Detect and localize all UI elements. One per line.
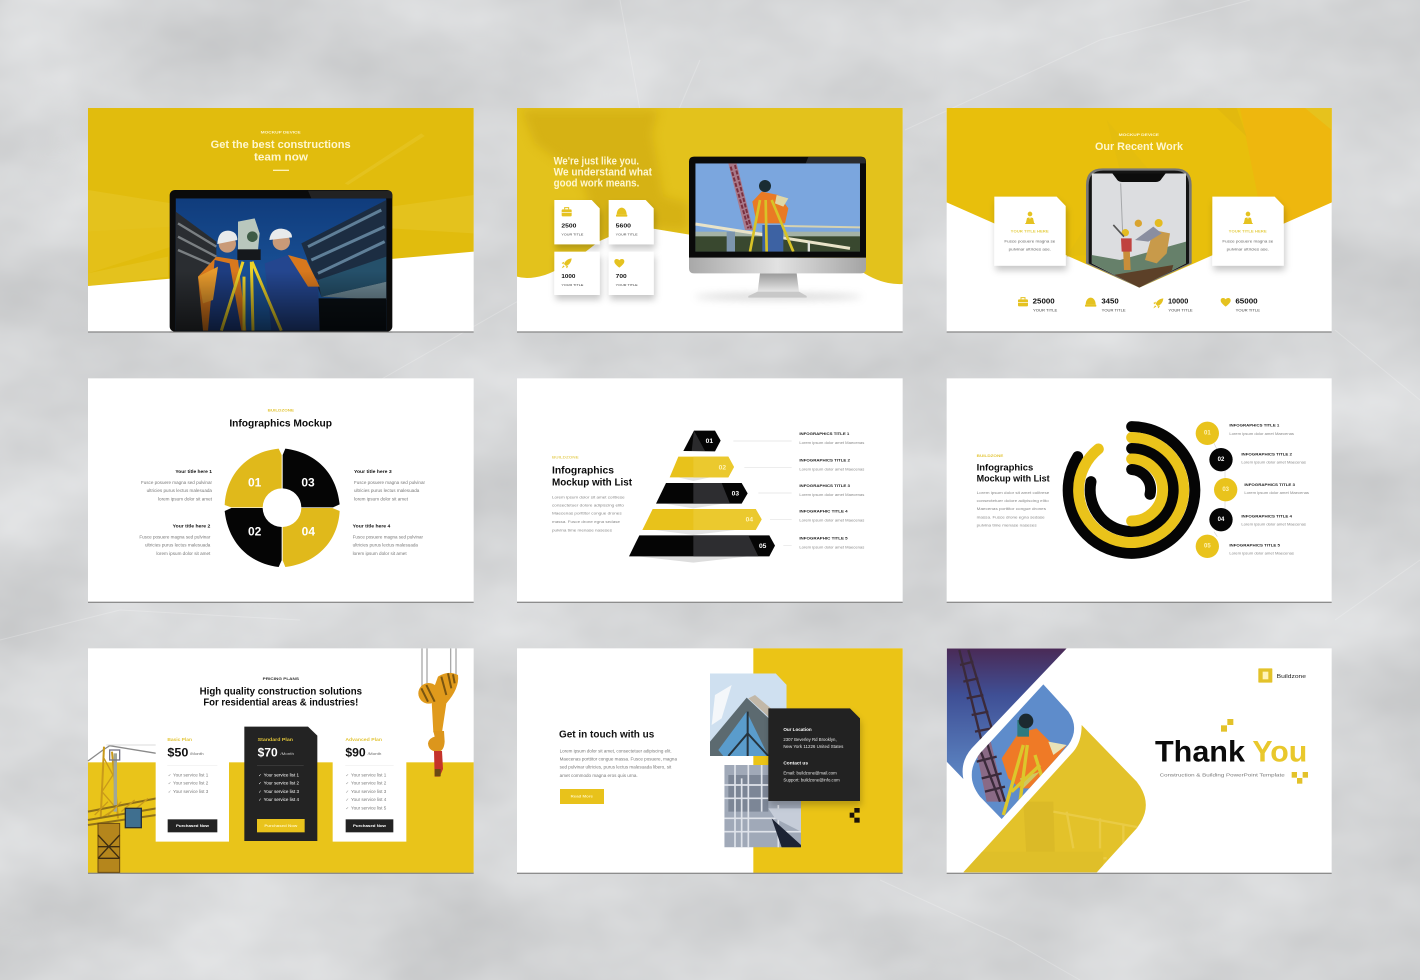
slide 8 background [517,648,903,873]
advanced plan card: ✓ [346,789,349,794]
donut chart [225,449,340,567]
text block 2: ultricies purus lectus malesuada [145,543,211,548]
list item 1: Lorem ipsum dolor amet Maecenas [799,441,864,445]
list item 04: Lorem ipsum dolor amet Maecenas [1241,523,1306,527]
text block 3: lorem ipsum dolor sit amet [354,496,409,501]
slide 9 bottom edge [947,873,1332,874]
advanced plan card: ✓ [346,805,349,810]
contact card: Contact us [783,760,809,765]
logo: Buildzone [1277,674,1306,680]
headline line 1: We're just like you. [554,155,639,167]
standard plan card: /Month [280,752,294,756]
heading: Get in touch with us [559,729,655,740]
tier 05 [629,535,775,556]
right info card: YOUR TITLE HERE [1229,229,1267,234]
list item 2: INFOGRAPHICS TITLE 2 [799,458,850,462]
stat card 1000: YOUR TITLE [561,283,583,287]
list item 05: 05 [1204,544,1211,550]
tier 01 [683,431,721,451]
left info card: Fusce posuere magna se [1004,238,1056,243]
list item 3: INFOGRAPHICS TITLE 3 [799,484,850,488]
standard plan card: $70 [258,747,278,760]
intro text: BUILDZONE [977,453,1004,458]
standard plan card: Your service list 4 [264,797,300,802]
intro text: Lorem ipsum dolor sit amet colitrese [552,494,626,499]
basic plan card: Your service list 2 [173,781,209,786]
slide 6 bottom edge [947,602,1332,603]
list item 4: INFOGRAPHIC TITLE 4 [799,510,849,514]
photo: glass building [710,673,787,756]
icon: pixels above title [1221,719,1233,732]
tier 04 [642,509,762,530]
list item 03 [1214,478,1309,501]
slide 9 background [947,648,1332,873]
crane hook [418,648,458,777]
subtitle: Construction & Building PowerPoint Template [1160,772,1285,777]
standard plan card: Your service list 2 [264,781,300,786]
stat card 700: YOUR TITLE [616,283,638,287]
stat 65000: 65000 [1235,298,1258,305]
list item 04: 04 [1218,517,1225,523]
contact card: Support: buildzone@info.com [783,777,840,782]
list item 02: 02 [1218,457,1225,463]
laptop photo: surveyors [176,198,386,332]
stat 10000: 10000 [1168,298,1188,305]
text block 4: Fusce posuere magna sed pulvinar [353,535,424,540]
pyramid [629,431,775,563]
icon: pixel cluster [850,808,860,823]
yellow wave [517,108,903,284]
basic plan card: Your service list 3 [173,789,209,794]
basic plan card [156,725,229,842]
headline line 3: good work means. [554,177,639,189]
right info card: pulvinar ultricies ase. [1227,246,1269,251]
list item 5: Lorem ipsum dolor amet Maecenas [799,546,864,550]
stat card 2500: 2500 [561,223,576,229]
stat card 1000: 1000 [561,274,575,280]
stat card 5600: YOUR TITLE [616,232,638,236]
intro text [552,455,633,532]
text block 2: Your title here 2 [173,524,211,529]
phone photo [1092,173,1186,288]
list item 1: INFOGRAPHICS TITLE 1 [799,432,849,436]
standard plan card: Your service list 1 [264,773,300,778]
tier 02: 02 [719,464,726,471]
text block 1: Fusce posuere magna sed pulvinar [141,480,213,485]
light perspective streaks [88,133,474,286]
phone [1086,168,1192,288]
title line 1: High quality construction solutions [200,686,362,697]
monitor [689,157,866,300]
photo: surveyor leaf [972,684,1074,819]
advanced plan card: $90 [345,747,366,760]
advanced plan card: /Month [368,752,381,756]
donut chart: 04 [302,525,315,539]
read more button [560,789,604,804]
slide 4 background [88,378,474,602]
text block 4: ultricies purus lectus malesuada [353,543,419,548]
basic plan card: Purchased Now [176,824,209,828]
stat card 700: 700 [616,274,627,280]
list item 05 [1196,535,1294,558]
tripod [221,262,281,331]
tier 01: 01 [706,438,713,445]
standard plan card: ✓ [258,781,262,786]
advanced plan card: Your service list 1 [351,773,387,778]
monitor photo: surveyor by crane [695,163,860,252]
advanced plan card: Your service list 2 [351,781,387,786]
tier 03 [656,483,748,504]
tier 02 [670,457,734,477]
eyebrow: PRICING PLANS [263,677,300,681]
text block 4 [353,524,424,556]
title line 2: team now [254,152,308,164]
intro text: massa. Fusce drone egna sedase [552,519,621,524]
slide 2 background [517,108,903,332]
advanced plan card: ✓ [346,773,349,778]
stat 65000: YOUR TITLE [1236,308,1261,312]
slide 6: concentric arcs infographic [947,378,1332,603]
text block 1: lorem ipsum dolor sit amet [158,496,213,501]
tier 03: 03 [732,491,739,498]
contact card: New York 11226 United States [783,744,843,749]
yellow right panel [753,648,903,873]
advanced plan card: Your service list 4 [351,797,387,802]
list item 1 [799,432,864,445]
slide 6 background [947,378,1332,602]
text block 1 [141,469,213,501]
text block 3 [354,469,426,501]
stat card 5600 [609,200,654,244]
basic plan card: $50 [167,747,188,760]
list item 02 [1209,448,1306,471]
stat 65000 [1221,298,1261,312]
left info card: YOUR TITLE HERE [1011,229,1049,234]
tower crane [88,745,156,872]
title line 2: For residential areas & industries! [203,698,358,709]
eyebrow: MOCKUP DEVICE [1119,132,1159,137]
contact card: 2307 Beverley Rd Brooklyn, [783,737,837,742]
yellow leaf with photo tint [960,722,1150,875]
standard plan card: ✓ [258,797,262,802]
slide 5 bottom edge [517,602,903,603]
list item 04: INFOGRAPHICS TITLE 4 [1241,514,1293,518]
contact card: Our Location [783,727,812,732]
standard plan card: Your service list 3 [264,789,300,794]
theodolite [238,218,260,250]
slide 7: pricing plans [88,648,474,874]
title line 1: Get the best constructions [211,139,351,151]
list item 2: Lorem ipsum dolor amet Maecenas [799,468,864,472]
slide 2 bottom edge [517,331,903,333]
advanced plan card: ✓ [346,797,349,802]
slide 3: phone mockup [947,108,1332,333]
right surveyor [265,229,320,331]
slide 1: laptop mockup [88,108,474,333]
stat 3450 [1085,298,1127,312]
title underline [273,170,289,171]
text block 3: Your title here 3 [354,469,392,474]
right info card [1212,197,1284,266]
advanced plan card: Purchased Now [353,824,386,828]
left info card: pulvinar ultricies ase. [1009,246,1051,251]
standard plan card: Standard Plan [258,737,293,742]
basic plan card: ✓ [168,789,171,794]
stat card 2500 [554,200,600,244]
title: Our Recent Work [1095,141,1183,153]
contact card: Email: buildzone@mail.com [783,771,837,776]
paragraph [560,748,678,778]
stat card 1000 [554,252,600,295]
title: Thank You: Thank [1155,736,1246,769]
text block 1: Your title here 1 [175,469,212,474]
advanced plan card: Advanced Plan [345,737,382,742]
tier 04: 04 [746,517,753,524]
slide 7 bottom edge [88,873,474,874]
list item 4 [799,510,864,523]
intro text: Infographics [977,463,1033,473]
intro text [977,453,1050,528]
laptop [170,190,392,332]
text block 4: lorem ipsum dolor sit amet [353,551,408,556]
list item 03: INFOGRAPHICS TITLE 3 [1244,483,1295,487]
list item 4: Lorem ipsum dolor amet Maecenas [799,519,864,523]
paragraph: amet commodo magna eros quis urna. [560,773,638,778]
paragraph: Maecenas porttitor congue massa. Fusce posuere, magna [560,756,678,761]
left info card [994,197,1066,266]
contact card [768,708,860,801]
list item 01: INFOGRAPHICS TITLE 1 [1229,424,1279,428]
text block 2: Fusce posuere magna sed pulvinar [139,535,211,540]
left surveyor [198,231,246,331]
list item 02: INFOGRAPHICS TITLE 2 [1241,452,1292,456]
slide 8 bottom edge [517,873,903,874]
standard plan card: Purchased Now [264,824,298,828]
intro text: pulvina time menase naseses [977,523,1037,528]
list item 2 [799,458,864,472]
list item 02: Lorem ipsum dolor amet Maecenas [1241,460,1306,464]
list item 01 [1196,422,1294,445]
list item 3 [799,484,864,497]
read more button: Read More [571,794,594,799]
text block 4: Your title here 4 [353,524,391,529]
standard plan card: ✓ [258,789,262,794]
basic plan card: Basic Plan [167,737,192,742]
icon: pixels below title [1292,772,1308,784]
yellow chevron header [947,108,1332,288]
title: Thank You: You [1252,736,1307,769]
list item 03: 03 [1222,487,1230,493]
slide 7 background [88,648,474,872]
basic plan card: Your service list 1 [173,773,209,778]
stat 10000 [1153,298,1194,312]
slide 5: pyramid infographic [517,378,903,603]
text block 3: Fusce posuere magna sed pulvinar [354,480,426,485]
eyebrow: MOCKUP DEVICE [261,129,301,134]
concentric arc chart [1068,427,1195,553]
headline line 2: We understand what [554,166,652,178]
advanced plan card: Your service list 3 [351,789,387,794]
list item 05: Lorem ipsum dolor amet Maecenas [1229,552,1294,556]
advanced plan card: Your service list 5 [351,805,387,810]
intro text: Lorem ipsum dolor sit amet colitrese [977,490,1050,495]
stat 25000: 25000 [1033,298,1055,305]
list item 04 [1209,508,1306,531]
intro text: Mockup with List [552,477,633,488]
stat 25000: YOUR TITLE [1033,308,1058,312]
eyebrow: BUILDZONE [268,408,294,413]
basic plan card: ✓ [168,781,171,786]
paragraph: Lorem ipsum dolor sit amet, consectetuer adipiscing elit. [560,748,672,753]
stat card 700 [609,252,654,295]
stat card 5600: 5600 [616,223,631,229]
text block 1: ultricies purus lectus malesuada [147,488,213,493]
photo: steel interior [724,765,801,847]
slide 3 background [947,108,1332,332]
stat 3450: YOUR TITLE [1102,308,1127,312]
list item 5 [799,536,864,550]
stat 25000 [1018,298,1058,312]
intro text: consectetuer dolore adipiscing elito [552,503,625,508]
intro text: pulvina time menase naseses [552,527,612,532]
intro text: massa. Fusce drone egna sedase [977,514,1046,519]
list item 3: Lorem ipsum dolor amet Maecenas [799,493,864,497]
intro text: Maecenas porttitor congue drones [977,506,1046,511]
photo: sky and crane [947,648,1067,782]
title: Thank You [1155,736,1307,769]
stat 3450: 3450 [1101,298,1119,305]
text block 2: lorem ipsum dolor sit amet [156,551,211,556]
slide 8: contact [517,648,903,874]
stat 10000: YOUR TITLE [1168,308,1194,312]
list item 01: 01 [1204,431,1211,437]
text block 3: ultricies purus lectus malesuada [354,488,420,493]
intro text: Infographics [552,466,614,477]
list item 5: INFOGRAPHIC TITLE 5 [799,536,848,540]
donut chart: 02 [248,525,262,539]
slide 5 background [517,378,903,602]
slide 1 bottom edge [88,331,474,333]
list item 05: INFOGRAPHICS TITLE 5 [1229,543,1280,547]
tier 05: 05 [759,543,767,550]
paragraph: sed pulvinar ultricies, purus lectus malesuada libero, sit [560,765,672,770]
slide 1 background [88,108,474,332]
standard plan card [244,727,317,841]
advanced plan card: ✓ [346,781,349,786]
slide 4 bottom edge [88,602,474,603]
yellow header band [88,108,474,286]
slide 9: thank you [947,648,1332,875]
stat card 2500: YOUR TITLE [561,232,583,236]
intro text: Maecenas porttitor congue drones [552,511,622,516]
list item 03: Lorem ipsum dolor amet Maecenas [1244,491,1309,495]
standard plan card: ✓ [258,773,262,778]
intro text: BUILDZONE [552,455,579,460]
intro text: consectetuer dolore adipiscing elito [977,498,1050,503]
logo [1258,668,1306,683]
donut chart: 01 [248,476,262,490]
basic plan card: /Month [190,752,204,756]
text block 2 [139,524,211,556]
donut chart: 03 [301,476,315,490]
slide 2: monitor mockup [517,108,903,333]
tonal background facets [1067,108,1332,257]
basic plan card: ✓ [168,773,171,778]
yellow lower band [88,762,474,873]
slide 3 bottom edge [947,331,1332,333]
ghost photo of worker [522,110,688,242]
title: Infographics Mockup [229,419,332,430]
intro text: Mockup with List [977,473,1050,483]
right info card: Fusce posuere magna se [1222,238,1274,243]
advanced plan card [333,725,406,842]
list item 01: Lorem ipsum dolor amet Maecenas [1229,432,1294,436]
slide 4: four-part donut infographic [88,378,474,603]
